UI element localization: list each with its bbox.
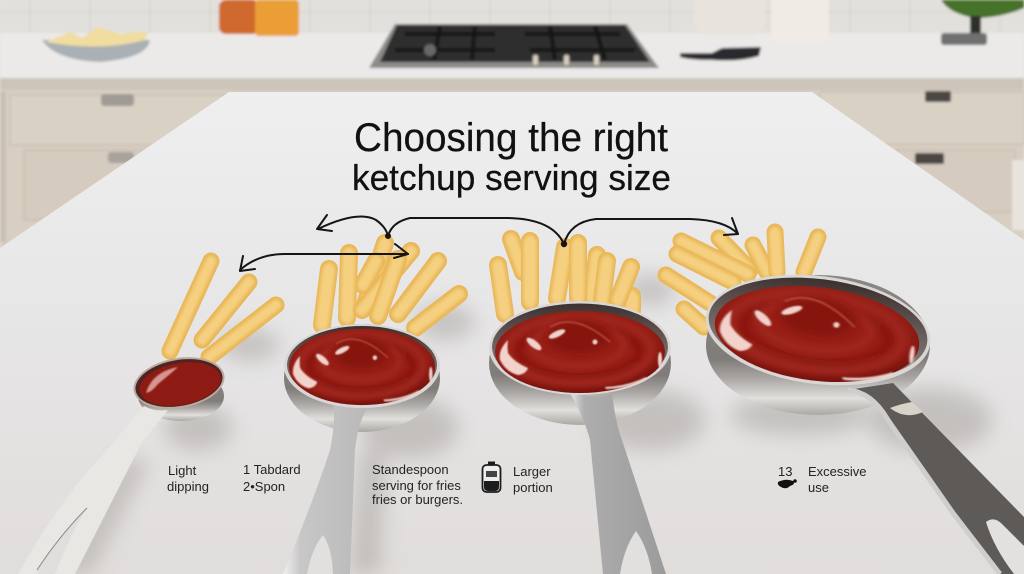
plate of fries	[42, 40, 150, 62]
kitchen background	[0, 0, 1024, 260]
title	[352, 116, 671, 198]
ketchup	[495, 311, 665, 393]
title: Choosing the right	[354, 116, 668, 160]
cups	[219, 0, 259, 34]
ketchup	[709, 275, 925, 393]
fries group 3	[498, 239, 632, 314]
icon: spill with number: 13	[778, 464, 792, 479]
utensil	[680, 47, 761, 60]
fries group 1	[170, 261, 276, 357]
label: 1 tablespoon: 2•Spon	[243, 479, 285, 494]
label: excessive use: use	[808, 480, 829, 495]
icon: ketchup jar	[482, 462, 500, 492]
title: ketchup serving size	[352, 157, 671, 198]
ketchup	[136, 356, 224, 412]
label: light dipping: dipping	[167, 479, 209, 494]
label: larger portion: portion	[513, 480, 553, 495]
label: 1 tablespoon: 1 Tabdard	[243, 462, 301, 477]
jars	[694, 0, 765, 35]
label: standard serving: Standespoon	[372, 462, 449, 477]
label: 1 tablespoon	[243, 462, 301, 494]
label: standard serving: fries or burgers.	[372, 492, 463, 507]
label: light dipping	[167, 463, 209, 494]
spoon 2: one tablespoon	[283, 324, 440, 574]
label: light dipping: Light	[168, 463, 197, 478]
spoon 1: light dipping	[18, 350, 229, 574]
spoon 3: standard serving	[489, 301, 671, 574]
fries group 2	[322, 243, 459, 328]
ketchup	[289, 329, 435, 405]
label: standard serving: serving for fries	[372, 478, 461, 493]
label: larger portion: Larger	[513, 464, 551, 479]
icon: spill with number	[778, 464, 797, 488]
arrows linking serving sizes	[240, 215, 738, 271]
label: excessive use	[808, 464, 867, 495]
label: excessive use: Excessive	[808, 464, 867, 479]
plant	[941, 0, 1024, 18]
fries group 4	[666, 232, 818, 327]
spoon 4: excessive use	[699, 263, 1024, 574]
stove	[369, 24, 659, 68]
shadows	[60, 274, 992, 574]
label: larger portion	[513, 464, 553, 495]
label: standard serving	[372, 462, 463, 507]
